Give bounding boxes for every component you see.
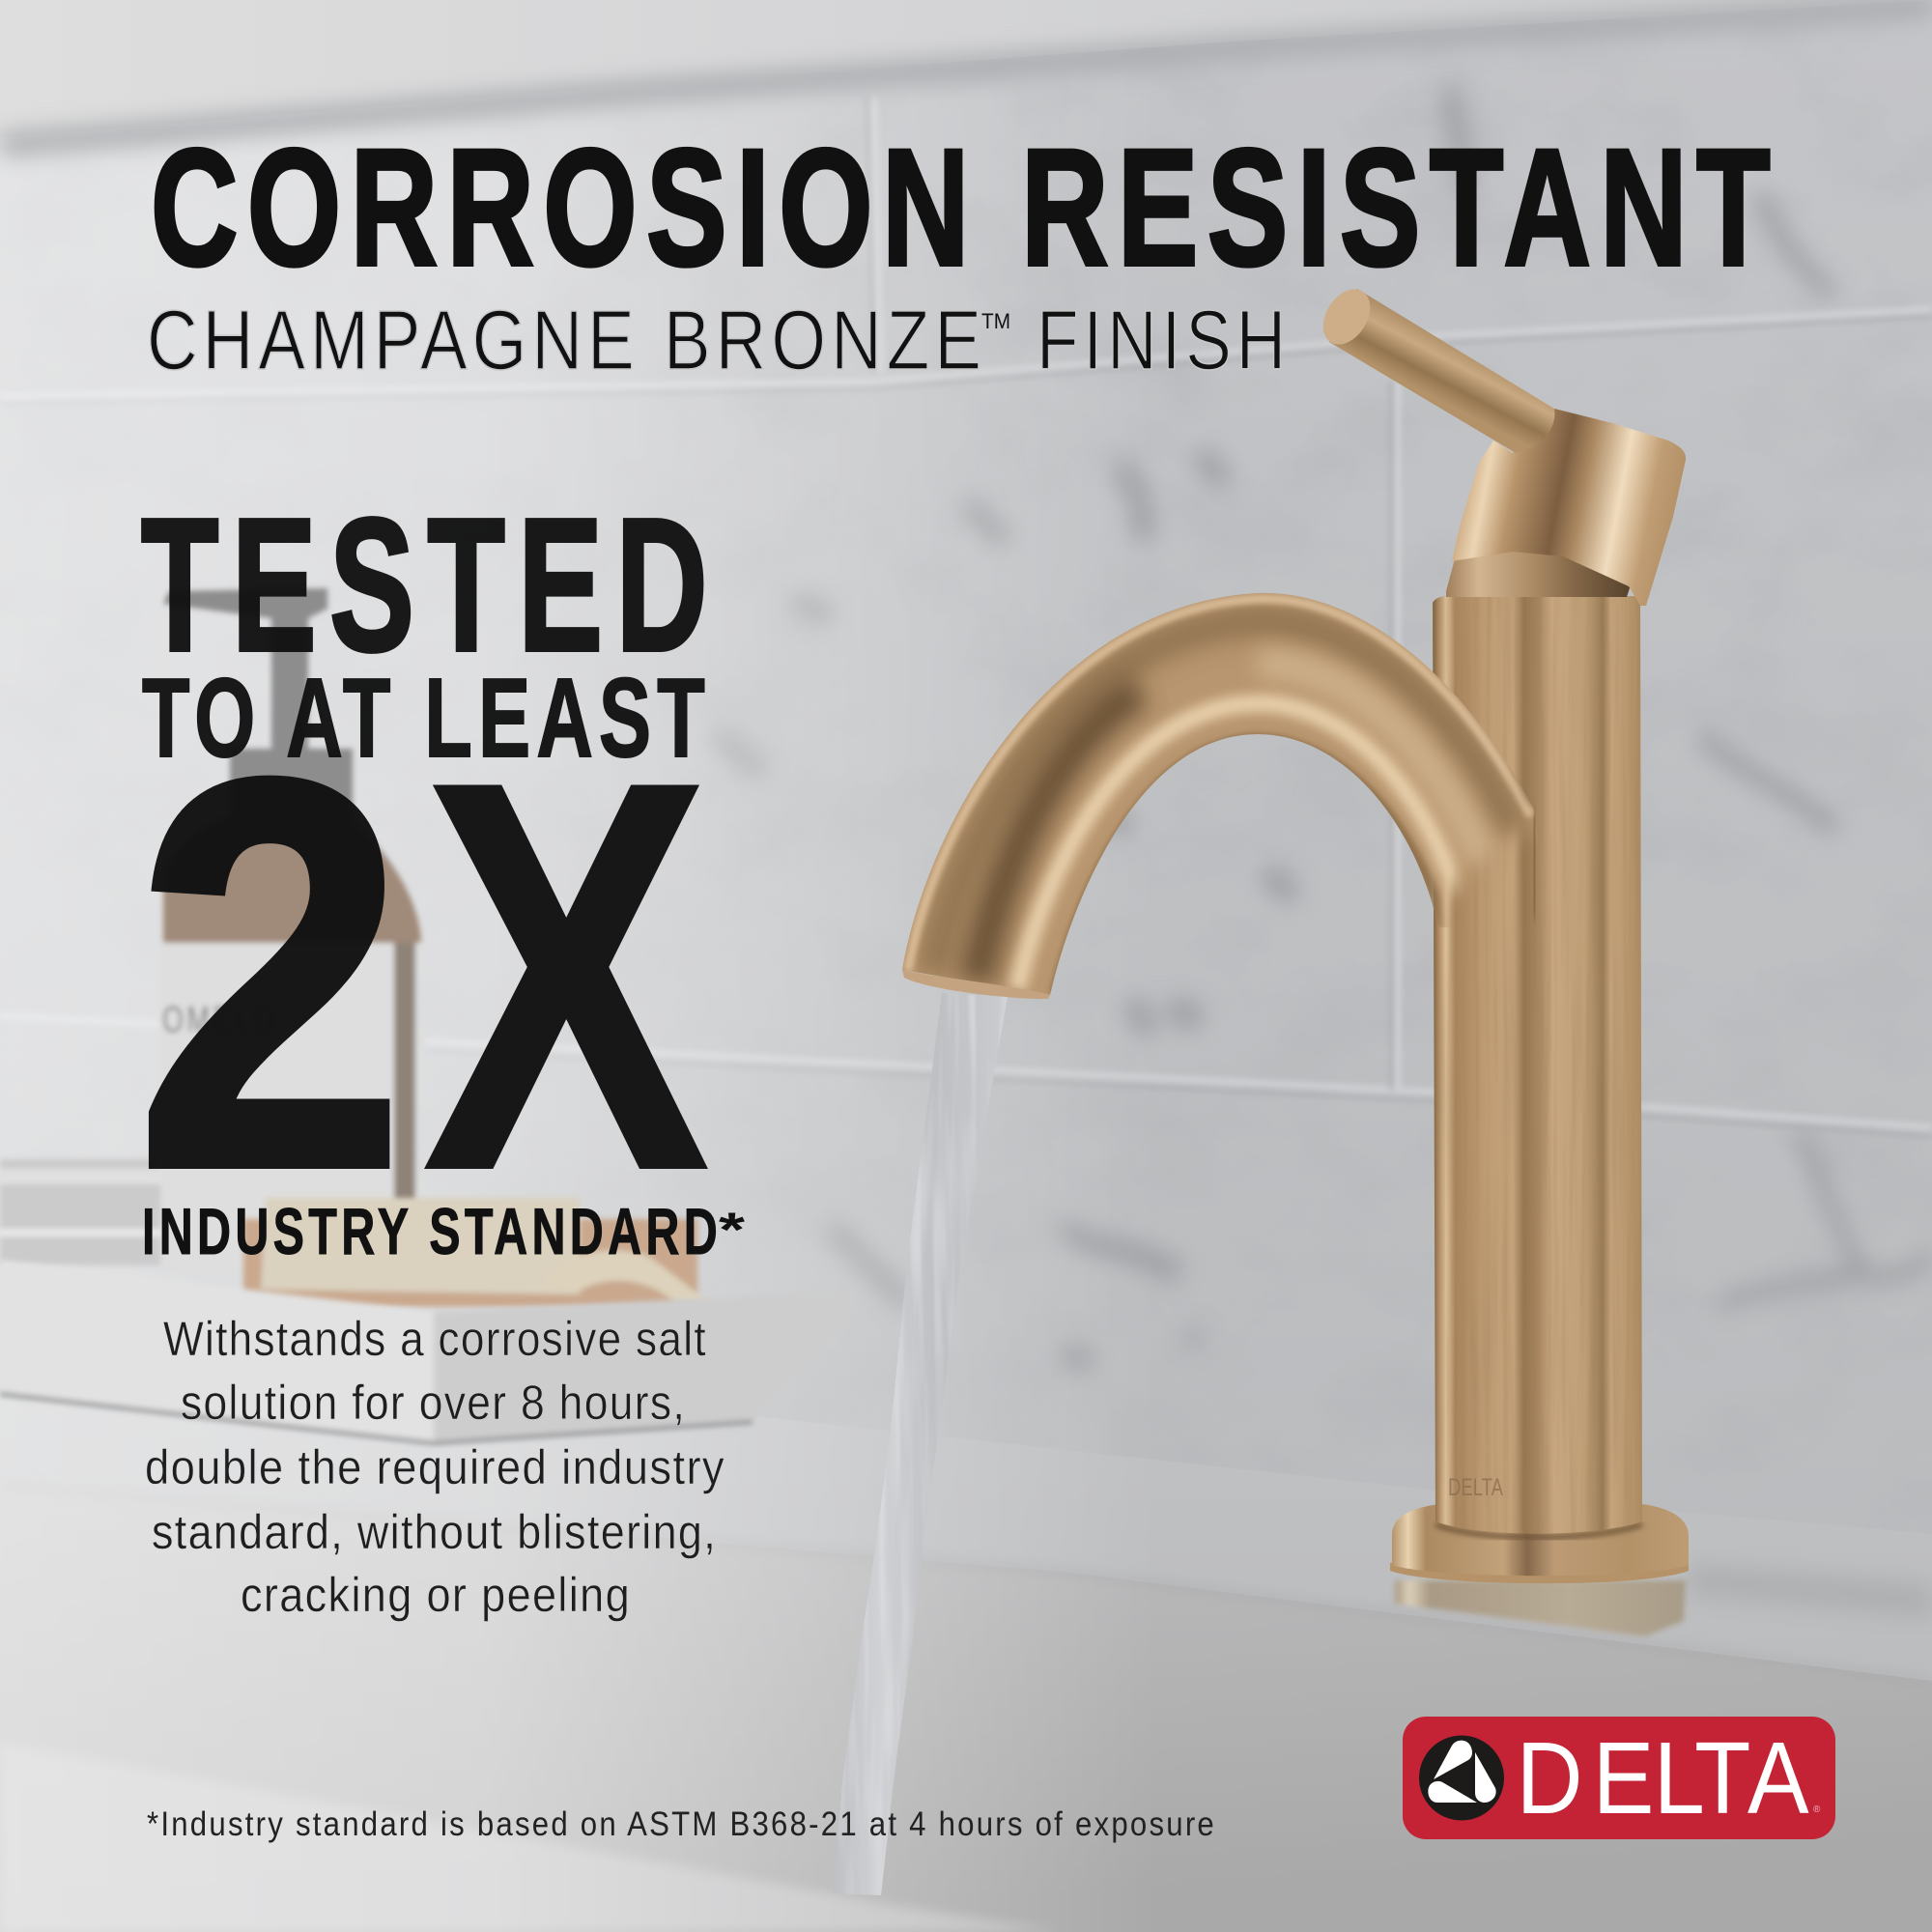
- faucet spout outlet: [902, 970, 1050, 999]
- crease where spout meets column: [1534, 811, 1535, 918]
- headline: tested to at least 2X: TESTED: [141, 479, 721, 691]
- body copy: standard, without blistering,: [152, 1505, 717, 1559]
- faucet handle: [1452, 409, 1686, 606]
- body copy: cracking or peeling: [241, 1568, 631, 1622]
- counter top: [0, 1391, 1932, 1932]
- headline: tested to at least 2X: INDUSTRY STANDARD: [142, 1195, 722, 1268]
- icon: Delta triangle mark: [1419, 1735, 1504, 1820]
- headline: tested to at least 2X: TO AT LEAST: [142, 655, 711, 781]
- blurred soap bottle: OMELO: [162, 1000, 278, 1040]
- soft shadow on counter: [1689, 1565, 1932, 1618]
- faucet body column: DELTA: [1448, 1474, 1503, 1501]
- headline: tested to at least 2X: 2: [135, 666, 406, 1283]
- body copy: Withstands a corrosive salt: [163, 1312, 707, 1366]
- headline: tested to at least 2X: *: [719, 1203, 746, 1257]
- sink basin: [0, 1485, 1932, 1932]
- blurred glass jar: [0, 1159, 160, 1265]
- faucet reflection on counter: [1395, 1580, 1686, 1636]
- running water stream: [838, 993, 1008, 1895]
- body copy: [145, 1312, 725, 1622]
- faucet lever: [1314, 281, 1554, 453]
- tile grout lines: [0, 97, 1932, 1127]
- faucet spout: [902, 593, 1536, 995]
- subtitle: CHAMPAGNE BRONZE: [147, 294, 986, 387]
- top shelf band: [0, 0, 1932, 145]
- wordmark: DELTA: [1517, 1721, 1809, 1835]
- headline: tested to at least 2X: X: [423, 668, 711, 1285]
- footnote: *Industry standard is based on ASTM B368-21 at 4 hours of exposure: [147, 1805, 1216, 1843]
- faucet neck: [1446, 541, 1633, 597]
- subtitle: TM: [981, 309, 1010, 333]
- body copy: solution for over 8 hours,: [181, 1376, 686, 1430]
- white soap dish: [0, 1260, 857, 1443]
- faucet: [889, 281, 1689, 1636]
- body copy: double the required industry: [145, 1440, 725, 1494]
- faucet body column: [1430, 589, 1647, 1536]
- subtitle: FINISH: [1037, 294, 1291, 387]
- faucet base flange: [1390, 1504, 1689, 1583]
- Delta logo: [1403, 1717, 1835, 1839]
- Delta logo: ®: [1813, 1804, 1821, 1815]
- wooden nail brush: [243, 1198, 715, 1307]
- headline: tested to at least 2X: [135, 479, 746, 1285]
- blurred soap bottle: [160, 588, 421, 1271]
